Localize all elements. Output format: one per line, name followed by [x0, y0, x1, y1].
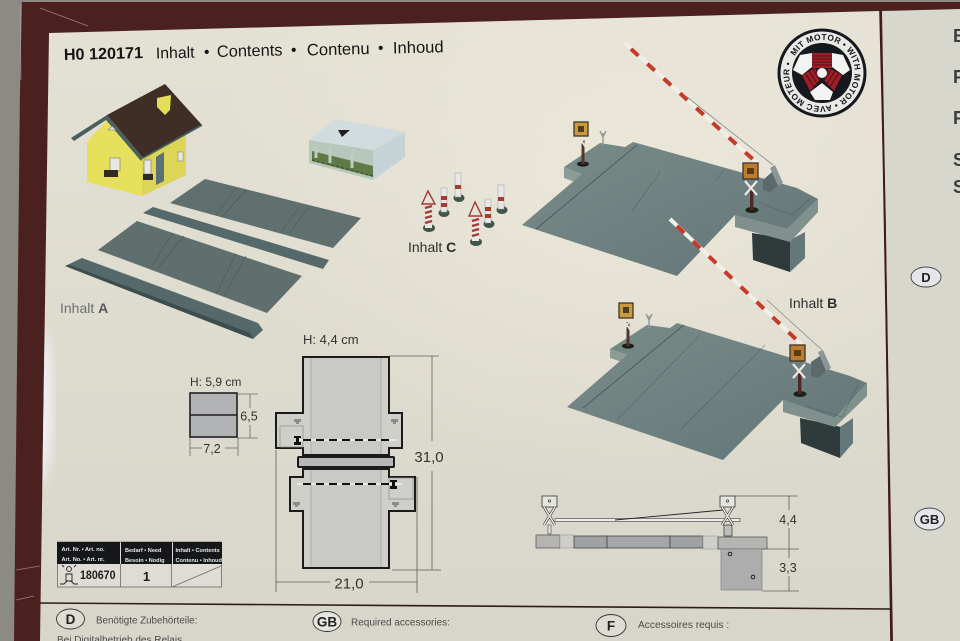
deck	[522, 142, 818, 276]
height label: H: 5,9 cm	[190, 375, 241, 389]
post sign 1	[454, 173, 464, 202]
barrier mechanism	[811, 350, 831, 378]
box outline	[190, 393, 237, 437]
support block	[752, 232, 805, 272]
quantity: 1	[143, 569, 150, 584]
article table	[57, 542, 222, 587]
side elevation drawing	[536, 496, 799, 591]
clipped headings	[953, 26, 960, 197]
icon: figure	[60, 561, 78, 584]
table header: Besoin • Nodig	[125, 558, 165, 564]
badge D	[911, 267, 941, 287]
table header: Art. No. • Art. nr.	[62, 557, 105, 563]
dimension 31,0: 31,0	[414, 449, 444, 466]
crossing model: upper	[522, 43, 818, 276]
plate: upper strip	[143, 207, 329, 269]
signal right	[790, 345, 806, 397]
right column fragments: GB	[920, 512, 939, 527]
table header: Contenu • Inhoud	[176, 558, 222, 564]
house model	[71, 84, 202, 196]
table header: Inhalt • Contents	[176, 548, 220, 554]
article number: 180670	[80, 568, 116, 582]
badge: with motor	[778, 28, 866, 118]
dimension 21,0: 21,0	[334, 576, 364, 592]
lower half	[290, 469, 415, 568]
block	[721, 549, 762, 590]
signal left	[619, 303, 634, 349]
warning sign 2	[469, 202, 482, 246]
title: •	[291, 42, 296, 59]
accessories: French	[596, 614, 729, 636]
catenary post left	[600, 131, 606, 146]
right column fragments	[911, 26, 960, 530]
warning sign 1	[422, 191, 435, 232]
signal left	[542, 496, 557, 534]
panel divider: horizontal	[40, 603, 891, 609]
accessories: French: F	[607, 618, 615, 634]
label: Inhalt B: Inhalt B	[789, 295, 837, 311]
right column fragments: D	[921, 270, 931, 285]
crossing model: lower	[567, 219, 867, 460]
upper half	[276, 357, 402, 455]
dimension 6,5: 6,5	[240, 410, 258, 424]
plate: lower strip	[65, 258, 263, 339]
label: Inhalt A: Inhalt A	[60, 300, 108, 316]
deck	[567, 323, 867, 460]
plan drawing: small box	[190, 375, 258, 456]
title: •	[204, 44, 209, 61]
post sign 4	[496, 185, 508, 214]
panel divider: vertical	[880, 11, 891, 641]
dimension lines	[190, 394, 258, 456]
title: H0 120171	[64, 44, 143, 64]
table frame	[58, 542, 222, 587]
dimension 4,4: 4,4	[779, 513, 797, 527]
motor icon lobes	[793, 53, 850, 100]
signal left	[574, 122, 589, 167]
accessories: English	[313, 612, 450, 632]
title: •	[378, 40, 383, 57]
column rules	[120, 564, 221, 587]
dimension 3,3: 3,3	[779, 561, 797, 575]
table header: Art. Nr. • Art. no.	[62, 547, 105, 553]
height label: H: 4,4 cm	[303, 332, 359, 347]
badge F	[596, 614, 626, 636]
accessories: English: GB	[317, 614, 337, 630]
dimension lines	[276, 356, 441, 593]
table header: Bedarf • Need	[125, 548, 162, 554]
post sign 3	[484, 199, 494, 228]
barrier arm	[670, 219, 822, 350]
heading D: Benötigte Zubehörteile:	[96, 616, 197, 626]
title: Inhalt	[156, 45, 195, 62]
plate: lower road	[98, 221, 302, 313]
dimension lines	[735, 496, 799, 591]
signal right	[743, 163, 758, 213]
barrier	[555, 510, 740, 522]
plate: upper road	[170, 179, 361, 248]
signal right	[720, 496, 735, 536]
title	[64, 37, 444, 64]
dimension 7,2: 7,2	[203, 442, 221, 456]
badge D	[56, 609, 84, 629]
heading GB: Required accessories:	[351, 618, 450, 628]
panel: right column	[882, 9, 960, 641]
barrier mechanism	[763, 165, 783, 192]
plan drawing: crossing	[276, 332, 444, 593]
title: Contenu	[307, 39, 370, 59]
middle bar	[298, 457, 394, 467]
barrier dashes	[293, 419, 402, 507]
title: Contents	[217, 41, 283, 61]
title: Inhoud	[393, 37, 444, 57]
heading F: Accessoires requis :	[638, 620, 729, 631]
badge ring text: MIT MOTOR • WITH MOTOR • AVEC MOTEUR •	[783, 34, 860, 112]
catenary post left	[646, 314, 652, 328]
road signs: contents C	[422, 173, 508, 246]
badge GB	[313, 612, 341, 632]
accessories: German	[56, 609, 197, 641]
label: Inhalt C: Inhalt C	[408, 239, 456, 255]
badge GB	[914, 508, 944, 530]
transformer box model	[309, 119, 405, 180]
accessories: German: D	[66, 612, 76, 627]
deck segments	[536, 535, 767, 549]
post sign 2	[438, 188, 450, 217]
support block	[800, 418, 853, 458]
barrier arm	[625, 43, 773, 165]
table header	[57, 542, 222, 564]
